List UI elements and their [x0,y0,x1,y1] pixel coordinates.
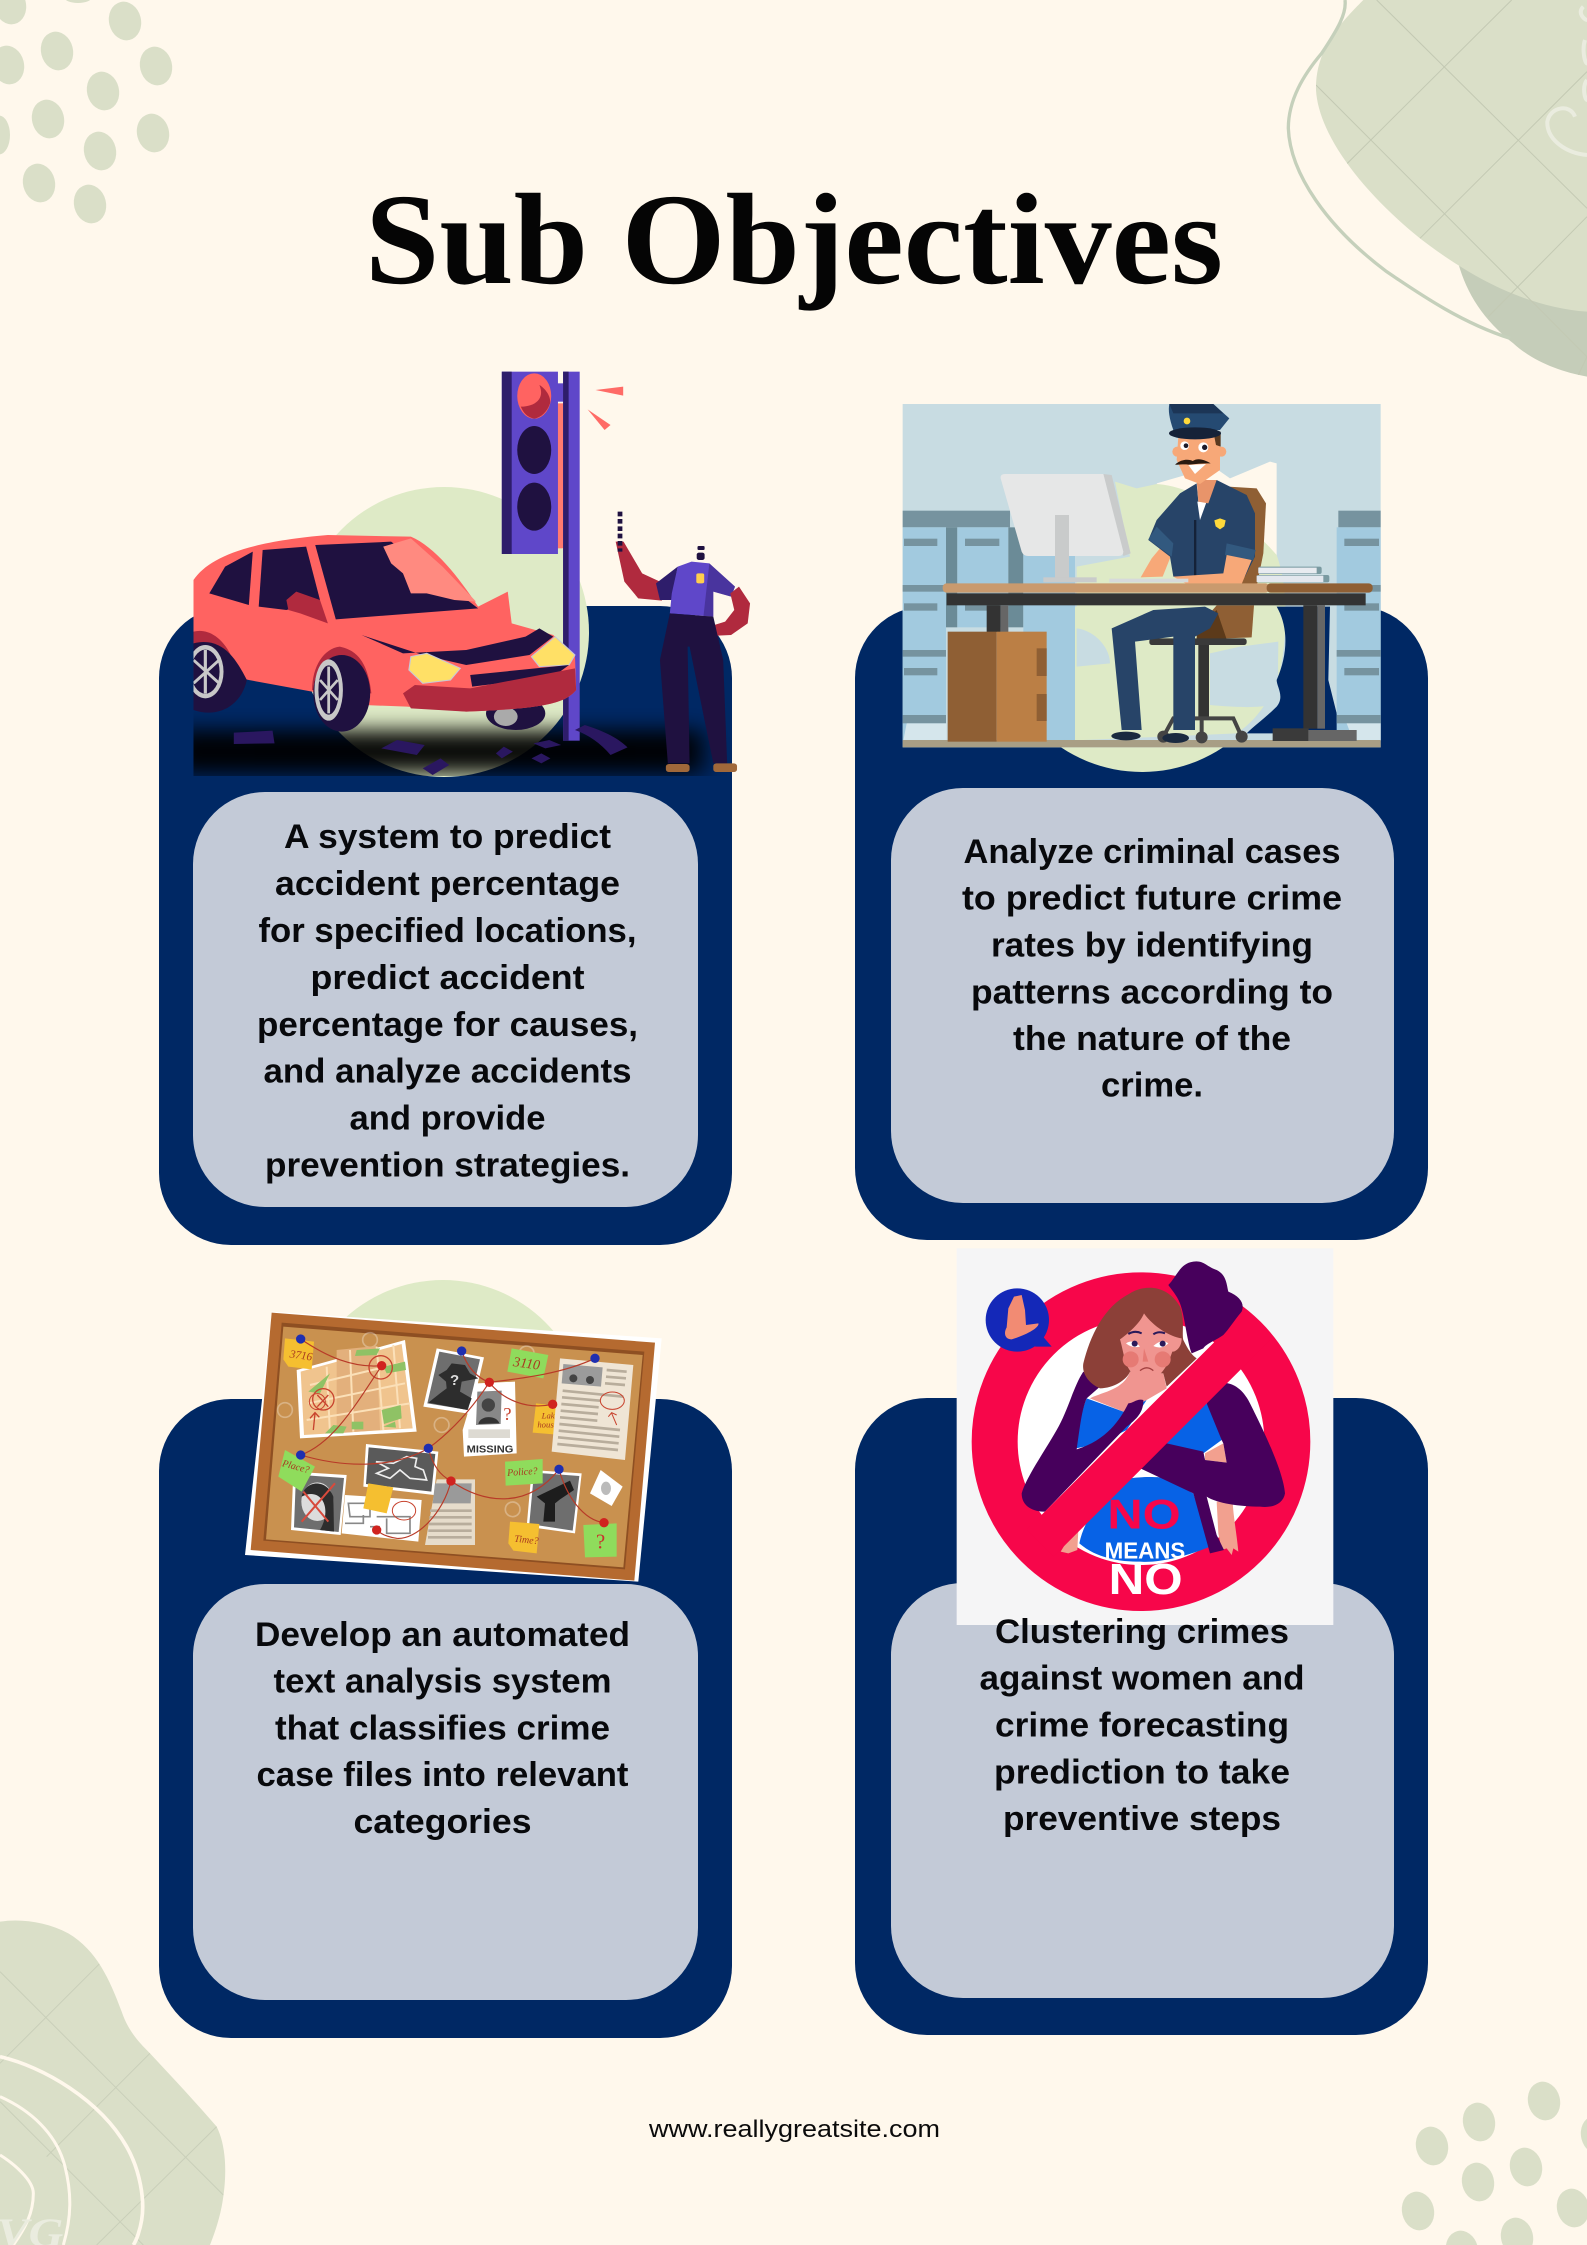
prohibition bar [1040,1327,1257,1543]
text block: text classification [255,1616,630,1841]
note: place [278,1450,315,1492]
car body [193,535,576,712]
text block: text classification: categories [354,1803,532,1841]
panel: accident prediction [159,372,750,1245]
wheel arch [312,647,371,693]
floor strip [903,740,1381,747]
woman neck and chest [1090,1372,1167,1412]
panel text box [193,1584,698,2000]
side mirror [286,592,328,623]
accent circle [298,1280,588,1425]
panel: criminal case analysis [855,404,1428,1240]
panel text box [891,788,1394,1203]
illustration: investigation cork board [245,1312,662,1582]
missing poster: ? [503,1404,511,1424]
officer legs [1111,607,1218,743]
light blue patches [1077,628,1282,707]
silhouette photo [423,1348,484,1414]
woman face [1120,1313,1182,1382]
note: lake house [533,1403,564,1435]
office backdrop [903,404,1381,747]
red string [301,1339,604,1538]
text block: accident prediction: accident percentage [275,865,620,903]
text block: crimes against women: Clustering crimes [995,1613,1289,1651]
traffic pole [557,372,580,741]
cardboard box [948,632,1047,742]
note: lake house: house? [537,1419,563,1429]
note: 3716 [283,1338,314,1369]
alert rays [588,387,623,430]
text block: crimes against women: prediction to take [994,1754,1290,1792]
panel background [855,1398,1428,2035]
text block: accident prediction: predict accident [310,959,584,997]
slogan: no means no: MEANS [1105,1537,1185,1563]
text block: criminal case analysis: the nature of the [1013,1020,1291,1058]
text block: accident prediction: and provide [350,1100,546,1138]
note: 3716: 3716 [288,1348,313,1364]
slogan: no means no [1105,1490,1185,1604]
note: time: Time? [514,1534,539,1547]
text block: text classification: Develop an automated [255,1616,630,1654]
prohibition ring [995,1295,1287,1588]
officer torso [1141,480,1256,584]
note: 3110: 3110 [511,1355,541,1374]
pins [296,1334,609,1535]
gun photo [527,1470,582,1533]
decoration: bottom-right dots [1398,2078,1587,2245]
woman hair [1083,1288,1197,1388]
white disc [1016,1317,1266,1567]
green cut-out [1027,482,1286,742]
officer [616,512,750,772]
traffic light [502,372,558,554]
hidden front wheel [486,706,546,730]
floor plan [342,1495,422,1542]
missing poster [463,1382,517,1457]
keyboard [1109,579,1188,582]
text block: accident prediction: A system to predict [284,818,611,856]
decoration: bottom-left blob [0,1920,225,2245]
portrait photo [291,1472,347,1535]
text block: accident prediction: for specified locations, [258,912,636,950]
panel text box [193,792,698,1207]
text block: criminal case analysis: Analyze criminal cases [964,833,1340,871]
grille [470,665,569,687]
debris [234,725,628,775]
front wheel [313,655,370,732]
note: yellow bb [363,1483,393,1513]
text block: accident prediction: percentage for causes, [257,1006,638,1044]
purple figure [1022,1372,1285,1553]
navy cut-out [1247,607,1342,733]
text block: crimes against women: against women and [980,1660,1304,1698]
crime scene photo [363,1444,438,1495]
panel: crimes against women [855,1248,1428,2035]
accent circle [997,482,1287,772]
newspaper small [425,1479,475,1545]
text block: criminal case analysis: rates by identifying [991,926,1313,964]
text block: criminal case analysis: patterns according to [971,974,1333,1012]
note: question: ? [596,1531,605,1553]
missing poster: MISSING [467,1445,514,1456]
note: 3110 [507,1348,548,1378]
text block: accident prediction: and analyze accidents [264,1052,632,1090]
text block: text classification: case files into relevant [256,1756,628,1794]
bumper [403,668,576,712]
illustration: no means no sign [957,1248,1333,1625]
illustration: police officer at desk [903,404,1381,747]
windows [209,542,478,619]
text block: criminal case analysis: to predict future crime [962,880,1342,918]
panel text box [891,1583,1394,1998]
note: time [508,1522,539,1553]
panel background [159,606,732,1245]
text block: accident prediction [257,818,638,1184]
decoration: top-right blob [1288,0,1587,377]
fingerprint card [590,1470,623,1506]
dress [1076,1398,1222,1562]
illustration: crashed car, traffic light and officer [174,372,750,775]
speech bubble with hand [986,1288,1052,1352]
silhouette photo: ? [450,1372,459,1389]
note: question [583,1523,617,1557]
note: place: Place? [280,1458,311,1476]
monitor [1001,474,1131,582]
desk [943,583,1373,741]
board frame [245,1312,662,1582]
rear wheel [187,642,247,713]
cream cut-out [1157,462,1277,567]
slogan: no means no: NO [1109,1556,1183,1604]
broken windshield [383,538,476,602]
newspaper [552,1358,633,1460]
officer head [1169,404,1229,503]
purple hair blob [1168,1261,1243,1353]
filing cabinets [903,511,1381,743]
text block: criminal case analysis [962,833,1342,1104]
accent circle [299,487,589,777]
footer website: www.reallygreatsite.com [648,2116,940,2143]
text block: criminal case analysis: crime. [1101,1066,1203,1104]
books [1257,567,1329,582]
text block: crimes against women: preventive steps [1003,1800,1281,1838]
note: police [505,1459,543,1486]
hood stripe [361,628,553,665]
exposed arm skin [1205,1443,1227,1463]
note: police: Police? [506,1466,538,1479]
title: Sub Objectives [365,168,1223,312]
panel: text classification [159,1280,732,2038]
text block: crimes against women [980,1613,1304,1838]
text block: accident prediction: prevention strategies. [265,1146,630,1184]
panel background [855,606,1428,1240]
note: lake house: Lake [541,1410,559,1420]
text block: crimes against women: crime forecasting [995,1706,1289,1744]
slogan: no means no: NO [1107,1490,1181,1537]
map [297,1340,417,1438]
chair [1149,487,1266,743]
text block: text classification: that classifies crime [275,1710,610,1748]
decoration: top-left dots [0,0,176,227]
panel background [159,1399,732,2038]
hands [1061,1502,1238,1555]
headlights [409,637,575,683]
text block: text classification: text analysis system [274,1663,612,1701]
watermark spirals [278,1333,606,1517]
